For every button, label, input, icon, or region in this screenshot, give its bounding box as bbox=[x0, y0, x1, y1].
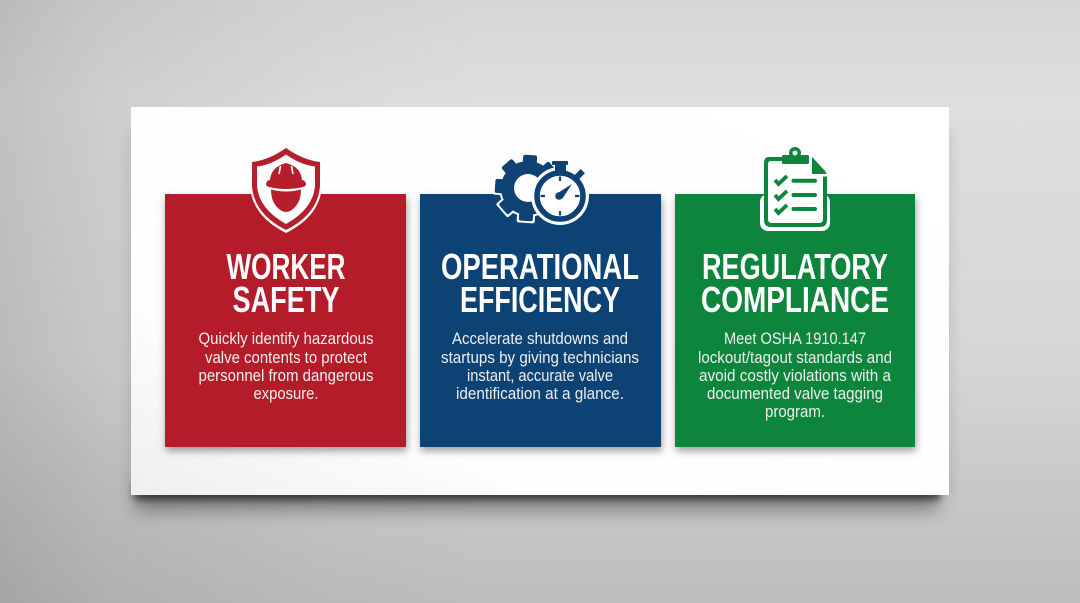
description: exposure. bbox=[254, 385, 318, 403]
icon: shield with hard hat bbox=[250, 146, 322, 233]
heading: EFFICIENCY bbox=[460, 279, 620, 320]
icon: checklist clipboard bbox=[760, 147, 830, 231]
white panel bbox=[131, 107, 949, 495]
heading: SAFETY bbox=[232, 279, 340, 320]
description bbox=[698, 330, 892, 421]
description: Accelerate shutdowns and bbox=[452, 330, 628, 348]
description: instant, accurate valve bbox=[467, 367, 613, 385]
heading: WORKER bbox=[226, 246, 346, 287]
heading bbox=[701, 246, 889, 320]
panel: regulatory compliance bbox=[675, 147, 915, 447]
heading: COMPLIANCE bbox=[701, 279, 889, 320]
panel: operational efficiency bbox=[420, 151, 661, 447]
green card background bbox=[675, 194, 915, 447]
heading: REGULATORY bbox=[702, 246, 888, 287]
description: program. bbox=[765, 403, 825, 421]
description bbox=[198, 330, 374, 403]
red card background bbox=[165, 194, 406, 447]
description: avoid costly violations with a bbox=[699, 367, 892, 385]
description: lockout/tagout standards and bbox=[698, 349, 892, 367]
blue card background bbox=[420, 194, 661, 447]
description: documented valve tagging bbox=[707, 385, 883, 403]
panel shadow bbox=[128, 130, 952, 510]
heading: OPERATIONAL bbox=[441, 246, 639, 287]
panel: worker safety bbox=[165, 146, 406, 447]
description: Meet OSHA 1910.147 bbox=[724, 330, 866, 348]
icon: gear and stopwatch bbox=[491, 151, 589, 225]
description: identification at a glance. bbox=[456, 385, 624, 403]
description: personnel from dangerous bbox=[198, 367, 374, 385]
description: Quickly identify hazardous bbox=[198, 330, 374, 348]
description: valve contents to protect bbox=[205, 349, 367, 367]
description: startups by giving technicians bbox=[441, 349, 639, 367]
description bbox=[441, 330, 639, 403]
heading bbox=[226, 246, 346, 320]
heading bbox=[441, 246, 639, 320]
